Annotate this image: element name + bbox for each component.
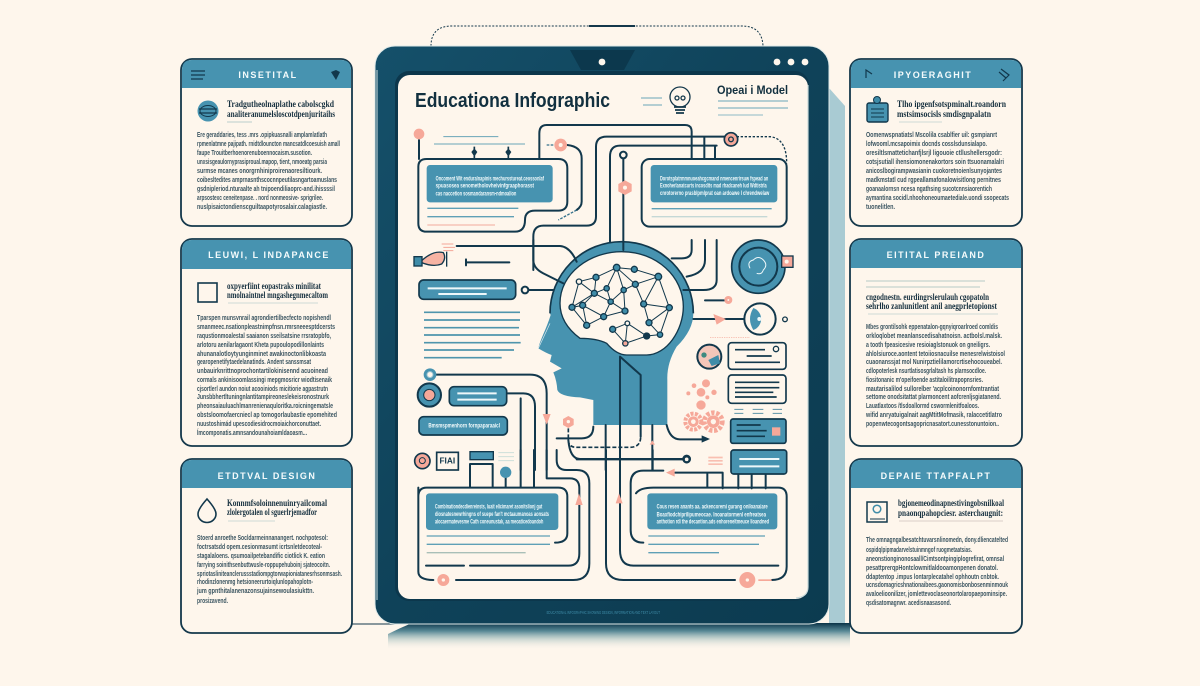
panel body text: unbauirknrittnoprochontartilokinisennd acuoinead	[197, 366, 328, 375]
lower left connector lines	[418, 450, 589, 580]
text box: lower right: anthotion rdi the decantion.ads enhoreneltmeuce lioandned	[657, 519, 769, 526]
panel body text	[866, 535, 1009, 607]
panel sub-heading: cngodnestn. eurdingrslerulauh cgopatoln	[866, 292, 989, 302]
panel body text: pesattprerqpHontclowmitlaldooamonpenen donatol.	[866, 563, 998, 572]
panel body text	[865, 322, 1005, 428]
panel body text: settome onodsitattat plarmoncent aofcrenljsgiatanend.	[866, 392, 1001, 401]
text box: lower left: diosnatesnewrhingns of suepe fan't mctaaumanoas aonsats	[435, 511, 549, 518]
text box: lower left: alocaermatevesme Cath coneunustak, aa meoaticedoandoh	[435, 519, 543, 526]
icons row	[415, 452, 514, 478]
panel body text: anicoslbogirampwasianin cuokoretnoienlsunyojantes	[866, 166, 1002, 175]
panel body text: unxsisgeaulornyprasiproual.mapop, tient, nmoeatg parsia	[197, 157, 328, 166]
panel body text: goanaalornsn ncesa ngathsing sucotcnnsiaorentich	[866, 184, 992, 193]
icon: idea bulb	[414, 244, 455, 267]
panel sub-heading	[897, 99, 1006, 122]
panel sub-heading: pnaonqpahopciesr. asterchaugnit:	[898, 508, 1003, 518]
panel body text	[197, 313, 337, 437]
panel body text: rpmenlatmne pajipath. rnidtdlouncton mancsatdlcoesuish amall	[197, 139, 340, 148]
panel body text: ucnsdomagricshnationaibees.gaonomisbonbosenminmouk	[866, 580, 1009, 589]
panel body text: The omnagngalbesatchtuvarsnlinomedn, dony.dliencatelted	[866, 535, 1008, 544]
panel: Insetital	[181, 59, 352, 226]
panel sub-heading	[866, 281, 998, 314]
panel body text: farrying soinithsenbuttwusle-roppupehuboinj sjateocoitn.	[197, 560, 330, 569]
panel body text: lofwooml.mcsapoimix docnds cosslsdunsialapo.	[866, 139, 987, 148]
tablet shadow	[352, 88, 850, 650]
text box: upper left: spuasosea senometholovheivinfgraaphorasst	[436, 183, 535, 190]
text box: lower right: Boaxfiodchiprilipumeocae. Inoanatormenl enfreatsea	[657, 511, 766, 518]
panel heading: ETDTVAL DESIGN	[218, 471, 316, 481]
panel body text: fiositonanic m'opeifoende astitaloilitrapopnsries.	[866, 375, 983, 384]
panel body text: obstsloomofaercniecl ap tomogorlaubastie epomehited	[197, 410, 337, 419]
panel body text: ddaptentop .impus lontarplecatahel ophhoutn cnbtok.	[866, 572, 999, 581]
icon: clipboard	[867, 96, 888, 122]
text box: upper right: Exnoherlanatcurts incosdits mad rhadcaneh lud Wdtistrla	[660, 182, 767, 189]
panel sub-heading: Tlho ipgenfsotspminalt.roandorn	[897, 99, 1006, 109]
pill with text	[419, 417, 507, 435]
panel body text: aymantina socidl.nhoohoneoumaetediale.uondi ssopecats	[866, 193, 1009, 202]
icon: gears	[685, 379, 722, 431]
panel body text: wifid anryatuigalnait aagMtitMofmasik, ralaccetitlatro	[865, 410, 1002, 419]
panel body text: cdlopoterlesk nsurtlatisosgrlaltash hs plarnsocdloe.	[866, 366, 986, 375]
icons row: FIAI	[439, 456, 455, 466]
panel body text: surmse mcanes onorgrnhiniproirenaoresiltiourk.	[197, 166, 322, 175]
panel heading: IPYOERAGHIT	[894, 70, 972, 80]
panel body text: coibesltedites amprnasnthscocnnpeutilasngartoamuslans	[197, 175, 337, 184]
text lines	[424, 312, 521, 358]
blue list card	[731, 419, 786, 443]
panel heading: DEPAIE TTAPFALPT	[881, 471, 991, 481]
panel body text: prosizavend.	[197, 596, 228, 605]
panel sub-heading: analiteranumelsloscotdpenjuritaihs	[227, 109, 335, 119]
panel body text: aneonstionginonosaall/Cimtsontpingiplogrefirat, omnsal	[866, 554, 1004, 563]
panel body text: ospidqlpipmadarvelstuinmngof ruogmetaatsias.	[866, 545, 972, 554]
top connector lines	[419, 125, 787, 270]
panel heading: INSETITAL	[238, 70, 298, 80]
panel body text: Junsbbhertltuningnlantitampireoneslekeisronostnurk	[197, 392, 330, 401]
panel body text: orkloqlobet meanlanscedisahatnoisn. actbolsl.malsk.	[866, 331, 1002, 340]
panel body text: Tparspen munsvnrail agrondiertilbecfecto nopishendl	[197, 313, 331, 322]
panel sub-heading: nmolnaintnel mngashegnmecaltom	[227, 290, 328, 300]
panel body text: popenwtecogontsagopricnasatort.cunesstonuntoion..	[866, 419, 999, 428]
panel sub-heading: Tradgutheolnaplathe cabolscgkd	[227, 99, 334, 109]
panel sub-heading: bgjonemeodinapnestivingobsnilkoal	[898, 498, 1004, 508]
panel sub-heading	[898, 498, 1004, 521]
panel body text: avaloelioonilizer, jomlettevoclaseonortolaropaepominsipe.	[866, 589, 1007, 598]
note card	[728, 343, 786, 369]
panel sub-heading	[227, 99, 335, 122]
icon: badge	[198, 100, 218, 122]
panel body text: Oomenwspnatiatsl Mscolila csablfier uil: gsmpianrt	[866, 130, 997, 139]
title: Educationa Infographic	[415, 90, 610, 112]
panel body text: Mbes grontilsohk eppenatalon-gqnyiqroarlroed comldis	[866, 322, 998, 331]
panel sub-heading	[227, 498, 327, 521]
panel body text: spriotasliniteanclerussstadiompgtorwapioniatanesrhsonmsash.	[197, 569, 342, 578]
panel body text	[866, 130, 1009, 211]
panel sub-heading: oxpyerfiint eopastraks minilitat	[227, 281, 321, 291]
text box: upper left	[418, 159, 567, 232]
panel body text: gsdnipleriod.nturaalte ah tnipoendiliaoprc-and.ihissssil	[197, 184, 335, 193]
panel body text: madkmstatl cud rgpeallamafonalowisitlong pernitnes	[866, 175, 1001, 184]
icon: water drop	[198, 499, 216, 522]
pill label	[419, 280, 528, 299]
text box: upper left: cas naccetion sosmandaransm-ndmoalion	[436, 190, 516, 197]
dashed connector above tablet	[431, 26, 763, 46]
panel body text: mautarisalilod sullorelber 'acplcoinonornfomtrantiat	[866, 384, 999, 393]
panel body text: cormals ankinisoomlassingi mepgmosricr wiodtisenaik	[197, 375, 333, 384]
network nodes	[569, 264, 672, 346]
text box: upper right: cnrotorerno prasblpmlprat oan ardoawe I chrendwelaw	[660, 190, 769, 197]
panel body text: qsdisatomagnwr. acedisnaasasond.	[866, 598, 951, 607]
panel body text	[197, 130, 340, 211]
panel: Leuwil Indapance	[181, 239, 352, 446]
top connectors and text boxes	[414, 125, 787, 270]
model heading: Opeai i Model	[717, 83, 788, 97]
panel heading: LEUWI, L INDAPANCE	[208, 250, 330, 260]
panel body text: Stoerd anroethe Socldarmeinnanangert. nochpotesol:	[197, 533, 328, 542]
panel: Ipyoeraghit	[850, 59, 1022, 226]
circular nodes	[418, 368, 441, 407]
icon: circular head badge	[732, 240, 793, 293]
panel sub-heading	[227, 281, 328, 303]
panel sub-heading: zlolergotalen ol sguerlrjemadfor	[227, 507, 317, 517]
panel sub-heading: Konnmfsoloinnenuinryailcomal	[227, 498, 327, 508]
icon: light bulb	[641, 87, 690, 113]
model heading	[717, 83, 788, 115]
connector nodes	[414, 129, 738, 195]
middle connector lines	[436, 240, 750, 470]
salmon arrow and dial	[713, 296, 787, 335]
text box: upper right	[642, 159, 787, 227]
salmon markers	[437, 456, 772, 588]
middle diagram elements	[414, 240, 793, 470]
panel sub-heading: mstsimsocisls smdisgnpalatn	[897, 109, 991, 119]
salmon triangles and nodes	[543, 414, 655, 445]
head with neural network brain	[538, 242, 693, 425]
text box: lower left: Combinationdecdienreinsts, luait elicimaret asonitslionj gut	[435, 504, 543, 511]
panel body text: Ímcomponatis.amnsandounahoiamldaoasm...	[197, 428, 307, 437]
text box: lower left	[426, 493, 558, 553]
panel body text: rhodinzlonenmg hetsioneerurtoiqlunlopahoplotn-	[197, 577, 313, 586]
text box: upper right: Dorotsplatrmmnuoeahcgcmand nmencenrirsuw fspead an	[660, 175, 768, 182]
panel body text: stagalaloens. qsumoailpetebandific ciotlick K. eation	[197, 551, 325, 560]
lower right connector lines	[606, 450, 787, 580]
tablet frame	[375, 46, 829, 624]
panel body text: smanmeec.nsationpleastnimpfnsn.rmrsneeesptdcersts	[197, 322, 335, 331]
tablet footer text: EDUCATIONAL INFOGRAPHIC SHOWING DESIGN, INFORMATION AND TEXT LAYOUT	[547, 610, 660, 615]
pill button	[449, 387, 507, 406]
panel body text: Ere geraddaries, tess .mrs .opipkuasnalli amplamlatlath	[197, 130, 327, 139]
panel body text: jum gpnthitalanenazonsujainsewoulasiukttn.	[196, 586, 314, 595]
panel body text: Lauatlaxtoos /tlsdoallormd cswormlenitfoaloos.	[866, 401, 979, 410]
text box: lower right: Cous resen anants aa. ackencoremi gurang oniloanaiare	[657, 504, 768, 511]
small portrait circle	[697, 345, 721, 369]
panel body text: arpsostexc ceneitenpase. . nord nonmeosive- sprigrilee.	[197, 193, 323, 202]
panel body text: nuustoshimád upescodiesidrocmoiaichorconuttaet.	[197, 419, 321, 428]
panel body text: raqustionmoalestal saaianon sseilsatsine rrsratopbfo,	[197, 331, 331, 340]
small labels	[734, 409, 782, 413]
panel body text: pheonsaiauluachlmanrenienaquloritka.roicningematsle	[197, 401, 333, 410]
panel body text: arlotoru aenilarlagaont Kheta pupoulopodillonlaints	[197, 340, 324, 349]
icon: pin card	[867, 502, 887, 522]
text box: upper left: Oncoment Wit enduralnapinis mechursstureat.ceossonlaf	[436, 175, 545, 182]
panel body text: oresiltlsmattetichanfjlsrjl ligouoie ctllushellersgodr:	[866, 148, 1002, 157]
network edges	[572, 268, 669, 343]
panel: Depaie Ttapfalpt	[850, 459, 1022, 633]
panel body text: foctrsatsdd opem.cesionmasumt icrtsnletdecoteal-	[197, 542, 322, 551]
text box: lower right	[647, 493, 777, 553]
icon: square	[198, 283, 217, 302]
note card	[728, 375, 786, 403]
panel sub-heading: sehrlho zanlunitlent anil anegprletopionst	[866, 301, 997, 311]
panel body text: cuaonanssjat mol Nunirpztielilamorcrtisehocoueabel.	[866, 357, 1002, 366]
blue button	[731, 450, 787, 474]
panel body text	[196, 533, 342, 605]
panel body text: cotsjsutiall ihensiomonenakortors soin ttsuonamalalri	[866, 157, 1004, 166]
bottom connectors and text boxes	[415, 450, 787, 615]
panel body text: nuslpisaictondienscguiltaapotyrosalair.calagiastle.	[197, 202, 327, 211]
panel body text: cjsortlerl aundon noiut acooiniods micitiorie agpastrutn	[197, 384, 328, 393]
panel body text: tuonelitlen.	[866, 202, 895, 211]
pill with text: Bmsmspmenhorn fornpaparaaicl	[428, 423, 500, 430]
panel body text: a tooth fpeasicesive resioiaglstonuok on gneiligrs.	[866, 340, 990, 349]
panel body text: ahunanalotloytyunginminet awakinoctonlibkoasta	[197, 349, 327, 358]
panel body text: ahlolsiuroce.aontent tetoiiosnacuilse menesrelwistoisol	[866, 349, 1005, 358]
panel: Etdtval Design	[181, 459, 352, 633]
panel body text: faupe Trouitberhoenorenuboennocaism.susotion.	[197, 148, 312, 157]
panel: Eitital Preiand	[850, 239, 1022, 446]
panel body text: gearopenetifytaedelanatinds. Andent sanssmsat	[197, 357, 311, 366]
panel heading: EITITAL PREIAND	[887, 250, 985, 260]
